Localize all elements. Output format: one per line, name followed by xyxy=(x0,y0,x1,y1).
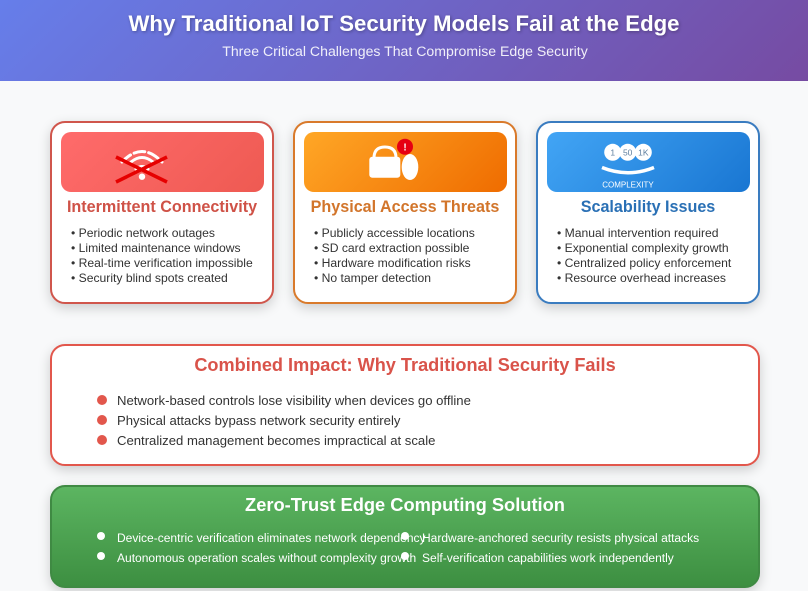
panel: zero-trust solution xyxy=(50,485,760,588)
icon: complexity scale: 1K xyxy=(638,147,649,157)
impact item: Physical attacks bypass network security entirely xyxy=(117,413,400,428)
solution item: Hardware-anchored security resists physical attacks xyxy=(422,531,699,545)
bullet dot xyxy=(401,552,409,560)
list: • Manual intervention required xyxy=(557,226,718,240)
panel: combined impact xyxy=(50,344,760,466)
list xyxy=(71,226,253,285)
bullet dot xyxy=(97,552,105,560)
impact item: Centralized management becomes impractical at scale xyxy=(117,433,435,448)
icon: complexity scale xyxy=(547,132,750,192)
bullet dot xyxy=(97,395,107,405)
subtitle: Three Critical Challenges That Compromise Edge Security xyxy=(222,43,588,59)
list: • Resource overhead increases xyxy=(557,271,726,285)
solution item: Self-verification capabilities work independently xyxy=(422,551,674,565)
heading: Physical Access Threats xyxy=(311,198,499,216)
list: • SD card extraction possible xyxy=(314,241,469,255)
icon: complexity scale: 1 xyxy=(610,147,615,157)
icon: wifi crossed out xyxy=(61,132,264,192)
list xyxy=(314,226,475,285)
heading: Scalability Issues xyxy=(581,198,715,216)
bullet dot xyxy=(97,415,107,425)
icon: complexity scale: 50 xyxy=(623,147,633,157)
impact item: Network-based controls lose visibility when devices go offline xyxy=(117,393,471,408)
solution item: Device-centric verification eliminates network dependency xyxy=(117,531,426,545)
list: • Real-time verification impossible xyxy=(71,256,253,270)
list: • Publicly accessible locations xyxy=(314,226,475,240)
list: • Hardware modification risks xyxy=(314,256,471,270)
panel: scalability issues xyxy=(536,121,760,304)
icon: lock and alert xyxy=(304,132,507,192)
panel: physical access threats xyxy=(293,121,517,304)
solution item: Autonomous operation scales without complexity growth xyxy=(117,551,416,565)
panel: intermittent connectivity xyxy=(50,121,274,304)
icon: complexity scale: COMPLEXITY xyxy=(602,180,654,190)
list: • Security blind spots created xyxy=(71,271,228,285)
icon: lock and alert: ! xyxy=(403,142,407,154)
title: Why Traditional IoT Security Models Fail at the Edge xyxy=(128,11,680,36)
list: • Limited maintenance windows xyxy=(71,241,241,255)
list: • Periodic network outages xyxy=(71,226,215,240)
bullet dot xyxy=(97,435,107,445)
heading: Zero-Trust Edge Computing Solution xyxy=(245,494,565,515)
list: • Centralized policy enforcement xyxy=(557,256,731,270)
list: • Exponential complexity growth xyxy=(557,241,729,255)
header banner xyxy=(0,0,808,81)
list: • No tamper detection xyxy=(314,271,431,285)
bullet dot xyxy=(401,532,409,540)
bullet dot xyxy=(97,532,105,540)
heading: Combined Impact: Why Traditional Security Fails xyxy=(194,355,616,375)
heading: Intermittent Connectivity xyxy=(67,198,257,216)
list xyxy=(557,226,732,285)
